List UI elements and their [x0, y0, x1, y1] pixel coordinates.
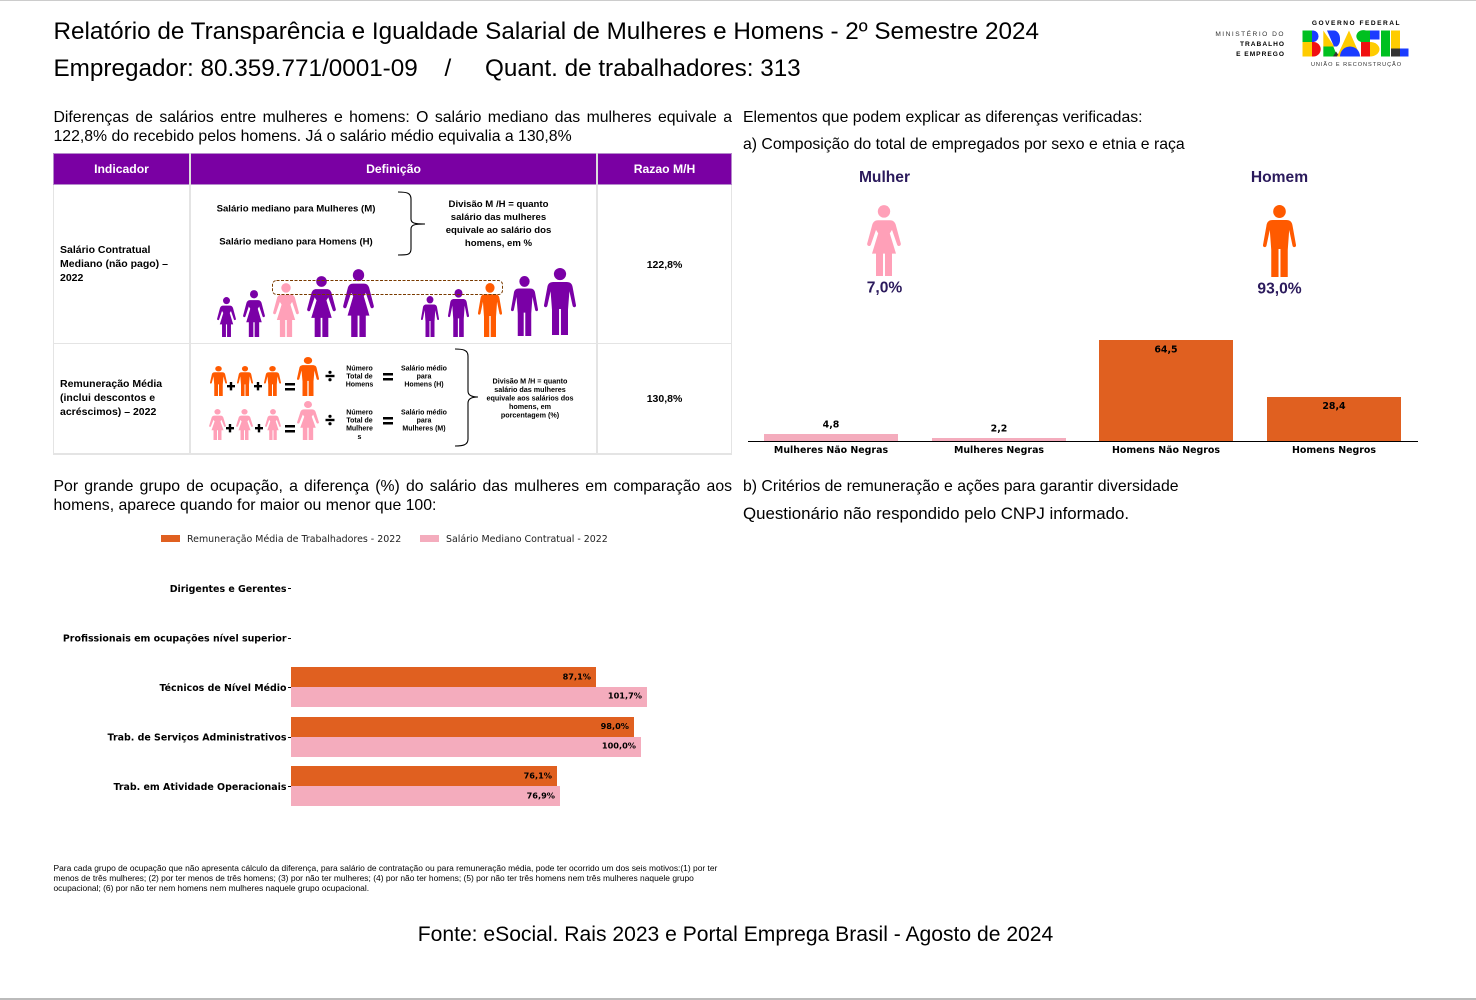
top border	[0, 0, 1476, 1]
source: Fonte: eSocial. Rais 2023 e Portal Emprega Brasil - Agosto de 2024	[418, 922, 1053, 946]
bar chart: composition by race: 28,4	[1322, 401, 1346, 412]
bar chart: occupation groups: 76,1%	[524, 770, 552, 780]
bar chart: composition by race: 4,8	[823, 420, 839, 430]
R	[1323, 30, 1334, 46]
bar chart: occupation groups: 87,1%	[563, 672, 591, 682]
row 2 labels: s	[358, 434, 362, 441]
row 2 labels: Total de	[346, 418, 373, 424]
row 2 labels: Número	[346, 366, 373, 372]
paragraph: occupation groups: Por grande grupo de ocupação, a diferença (%) do salário das mulheres em comparação aos homens, aparece quando for maior ou menor que 100:	[54, 478, 732, 514]
employer heading: /	[444, 55, 451, 82]
logo: Ministério do Trabalho e Emprego: E EMPREGO	[1236, 51, 1285, 58]
bar chart: occupation groups: 76,9%	[527, 790, 555, 800]
heading: composition: a) Composição do total de empregados por sexo e etnia e raça	[743, 136, 1185, 153]
median highlight dashed box	[272, 280, 502, 294]
footnote	[54, 863, 718, 893]
row 2 division text: equivale aos salários dos	[486, 394, 574, 402]
row 2 men formula	[210, 357, 393, 396]
table header row: Indicador	[94, 162, 149, 176]
row 1 division text: homens, em %	[465, 238, 533, 249]
bar chart: composition by race: Homens Não Negros	[1112, 445, 1220, 456]
row 2 labels: Salário médio	[401, 410, 447, 416]
bar chart: composition by race: 2,2	[991, 424, 1007, 434]
row 2 division text: salário das mulheres	[494, 385, 566, 394]
woman composition: 7,0%	[867, 280, 902, 296]
row 2 labels: Mulhere	[346, 426, 373, 432]
table header row	[53, 153, 732, 185]
row 2 labels: Homens	[346, 382, 373, 388]
man composition	[1251, 169, 1308, 298]
row 2 division text: Divisão M /H = quanto	[493, 376, 568, 386]
chart legend: Remuneração Média de Trabalhadores - 2022	[187, 534, 401, 545]
bar chart: occupation groups: 100,0%	[602, 740, 636, 750]
chart legend: Salário Mediano Contratual - 2022	[446, 534, 608, 545]
logo: Ministério do Trabalho e Emprego	[1215, 29, 1285, 58]
heading: explaining elements: Elementos que podem explicar as diferenças verificadas:	[743, 108, 1143, 126]
table header row: Razao M/H	[634, 162, 695, 176]
logo: Governo Federal Brasil	[1302, 20, 1408, 68]
row 2 labels: Salário médio	[401, 366, 447, 372]
L	[1391, 30, 1400, 48]
bar chart: occupation groups: 98,0%	[601, 721, 629, 731]
brace row 2	[455, 349, 478, 446]
employer heading: Quant. de trabalhadores: 313	[485, 55, 801, 82]
row 2 division text	[486, 376, 574, 420]
bar chart: composition by race: Mulheres Não Negras	[774, 445, 888, 456]
row 2 labels	[346, 366, 447, 441]
row 2 labels: Total de	[346, 374, 373, 380]
row 1 division text: equivale ao salário dos	[446, 225, 551, 236]
row 1 division text	[446, 199, 551, 249]
woman composition	[859, 169, 910, 296]
icons: women row	[217, 269, 374, 337]
row 1 division text: salário das mulheres	[451, 212, 546, 223]
footnote: ocupacional; (6) por não ter nem homens nem mulheres naquele grupo ocupacional.	[54, 883, 369, 893]
footnote: Para cada grupo de ocupação que não apresenta cálculo da diferença, para salário de contratação ou para remuneração média, pode ter ocorrido um dos seis motivos:(1) por ter	[54, 863, 717, 873]
row 2 division text: homens, em	[509, 402, 551, 411]
table header row: Definição	[366, 162, 421, 176]
row 2 labels: Mulheres (M)	[402, 426, 446, 432]
logo: Governo Federal Brasil: UNIÃO E RECONSTRUÇÃO	[1311, 61, 1402, 68]
employer heading	[54, 55, 801, 82]
logo: Ministério do Trabalho e Emprego: MINISTÉRIO DO	[1215, 29, 1285, 38]
row 1 definition labels	[217, 204, 375, 248]
row 1 definition labels: Salário mediano para Homens (H)	[219, 236, 373, 248]
bar chart: occupation groups: Trab. de Serviços Administrativos	[108, 732, 287, 744]
row 2 labels: para	[417, 418, 431, 424]
bar chart: occupation groups: Profissionais em ocupações nível superior	[63, 634, 287, 644]
A	[1337, 30, 1360, 56]
bottom border	[0, 998, 1476, 1000]
heading: criteria: b) Critérios de remuneração e ações para garantir diversidade	[743, 478, 1179, 494]
icons: men row	[421, 268, 576, 337]
footnote: menos de três mulheres; (2) por ter menos de três homens; (3) por não ter mulheres; (4) por não ter homens; (5) por não ter três homens nem três mulheres naquele grupo	[54, 873, 694, 883]
bar chart: occupation groups	[63, 584, 647, 806]
B	[1302, 30, 1312, 42]
chart legend	[161, 534, 608, 545]
bar chart: occupation groups: Dirigentes e Gerentes	[170, 584, 287, 595]
bar chart: composition by race: Mulheres Negras	[954, 445, 1044, 456]
bar chart: composition by race: Homens Negros	[1292, 445, 1376, 456]
row 2 women formula	[209, 401, 393, 440]
bar chart: occupation groups: Técnicos de Nível Médio	[159, 683, 287, 694]
row 1 definition labels: Salário mediano para Mulheres (M)	[217, 204, 375, 214]
logo: Governo Federal Brasil: GOVERNO FEDERAL	[1312, 20, 1401, 27]
row 2 ratio: 130,8%	[647, 392, 682, 404]
brace row 1	[398, 192, 425, 255]
man composition: 93,0%	[1257, 280, 1302, 298]
row 2 division text: porcentagem (%)	[501, 410, 560, 420]
row 2 labels: para	[417, 374, 431, 380]
row 1 ratio: 122,8%	[647, 258, 682, 270]
I	[1381, 30, 1390, 56]
bar chart: composition by race: 64,5	[1154, 344, 1178, 356]
title: Relatório de Transparência e Igualdade Salarial de Mulheres e Homens - 2º Semestre 2024	[54, 18, 1039, 45]
bar chart: composition by race	[748, 340, 1418, 456]
bar chart: occupation groups: Trab. em Atividade Operacionais	[113, 782, 287, 793]
S	[1356, 30, 1370, 42]
intro paragraph: salary differences: Diferenças de salários entre mulheres e homens: O salário mediano das mulheres equivale a 122,8% do recebido pelos homens. Já o salário médio equivalia a 130,8%	[54, 108, 732, 145]
row 2 labels: Número	[346, 410, 373, 416]
logo: Ministério do Trabalho e Emprego: TRABALHO	[1240, 41, 1285, 48]
row 1 division text: Divisão M /H = quanto	[449, 199, 549, 210]
row 2 labels: Homens (H)	[404, 382, 444, 388]
row 2 indicator: Remuneração Média (inclui descontos e acréscimos) – 2022	[60, 378, 162, 418]
table	[53, 153, 732, 455]
employer heading: Empregador: 80.359.771/0001-09	[54, 55, 418, 82]
woman composition: Mulher	[859, 169, 910, 186]
bar chart: occupation groups: 101,7%	[608, 690, 642, 700]
row 1 indicator: Salário Contratual Mediano (não pago) – 2022	[60, 244, 168, 284]
text: questionnaire not answered: Questionário não respondido pelo CNPJ informado.	[743, 504, 1129, 523]
man composition: Homem	[1251, 169, 1308, 186]
